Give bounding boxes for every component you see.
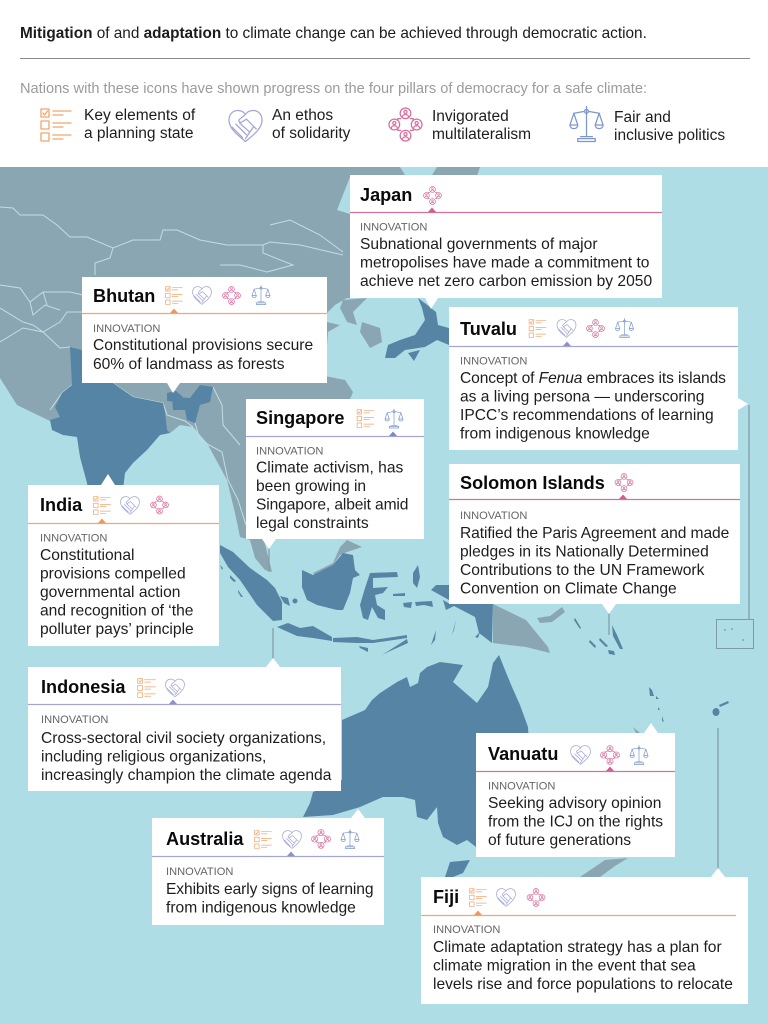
panel: Australia: INNOVATION [166, 866, 233, 878]
map: Vanuatu [649, 687, 664, 722]
legend: inclusive politics: inclusive politics [614, 127, 725, 144]
panel: Fiji: climate migration in the event that sea [433, 958, 696, 974]
panel: India: polluter pays’ principle [40, 621, 194, 638]
panel: Tuvalu: INNOVATION [460, 356, 527, 368]
panel: Bhutan: INNOVATION [93, 323, 160, 335]
legend: solidarity [229, 107, 351, 142]
panel: Vanuatu [476, 723, 675, 857]
panel: Tuvalu: Concept of Fenua embraces its islands [460, 370, 726, 387]
panel: Fiji: Fiji [433, 887, 459, 907]
panel: Fiji [421, 868, 748, 1004]
panel: Solomon Islands: pledges in its Nationally Determined [460, 544, 709, 560]
panel: Bhutan [82, 277, 327, 393]
panel: Vanuatu: Vanuatu [488, 744, 558, 764]
panel: Vanuatu: INNOVATION [488, 780, 555, 792]
legend: inclusive politics [570, 106, 725, 144]
panel: Singapore: been growing in [256, 478, 366, 495]
panel: India: India [40, 495, 83, 515]
panel: Japan: achieve net zero carbon emission by 2050 [360, 273, 652, 290]
panel: Singapore: Singapore, albeit amid [256, 496, 408, 514]
panel: India: provisions compelled [40, 566, 186, 582]
panel: India: and recognition of ‘the [40, 602, 193, 620]
leader lines [269, 405, 749, 870]
legend: planning state: Key elements of [84, 107, 196, 124]
map: Solomon Islands [574, 618, 623, 655]
map: Fiji [712, 708, 720, 716]
panel: Fiji: Climate adaptation strategy has a plan for [433, 939, 722, 956]
legend: multilateralism [389, 108, 531, 143]
panel: Japan: metropolises have made a commitment to [360, 254, 650, 272]
panel: Indonesia: Cross-sectoral civil society organizations, [41, 730, 326, 747]
legend: multilateralism: multilateralism [432, 126, 531, 143]
panel: Australia: from indigenous knowledge [166, 900, 356, 916]
map: India [50, 347, 170, 490]
legend: planning state: a planning state [84, 125, 193, 142]
panel: Tuvalu [449, 307, 748, 450]
panel: Tuvalu: Tuvalu [460, 319, 517, 339]
legend [41, 106, 725, 144]
panel: Japan: Japan [360, 185, 412, 205]
panel: Solomon Islands [449, 464, 740, 614]
panel: Vanuatu: Seeking advisory opinion [488, 795, 661, 812]
subtitle: Nations with these icons have shown progress on the four pillars of democracy for a safe climate: [20, 81, 647, 97]
panel: Australia: Australia [166, 829, 244, 849]
title: Mitigation of and adaptation to climate change can be achieved through democratic action. [20, 25, 647, 42]
legend: solidarity: An ethos [272, 107, 333, 124]
panel: Australia: Exhibits early signs of learning [166, 881, 373, 898]
panel: India: governmental action [40, 584, 180, 601]
panel: Japan [350, 175, 662, 309]
panel: Singapore: Singapore [256, 408, 344, 428]
map: country borders [0, 207, 343, 525]
legend: solidarity: of solidarity [272, 125, 351, 142]
panel: India: INNOVATION [40, 532, 107, 544]
legend: multilateralism: Invigorated [432, 108, 509, 125]
panel: Fiji: INNOVATION [433, 924, 500, 936]
panel: Japan: Subnational governments of major [360, 236, 598, 253]
panel: Indonesia: Indonesia [41, 677, 126, 697]
panel: Singapore: INNOVATION [256, 446, 323, 458]
panel: Fiji: levels rise and force populations to relocate [433, 976, 733, 993]
panel: Indonesia [28, 658, 341, 791]
panel: Japan: INNOVATION [360, 222, 427, 234]
panel: Australia [152, 809, 384, 925]
panel: Solomon Islands: Ratified the Paris Agreement and made [460, 525, 729, 542]
panel: Vanuatu: of future generations [488, 832, 631, 849]
panel: Solomon Islands: Convention on Climate Change [460, 580, 677, 598]
panel: Vanuatu: from the ICJ on the rights [488, 814, 663, 830]
header [20, 25, 750, 97]
panel: India: Constitutional [40, 547, 134, 564]
map: Indonesia [220, 545, 282, 621]
panel: Tuvalu: as a living persona — underscoring [460, 388, 704, 406]
panel: Bhutan: 60% of landmass as forests [93, 356, 285, 373]
legend: inclusive politics: Fair and [614, 109, 671, 126]
panel: Solomon Islands: Contributions to the UN Framework [460, 562, 705, 579]
panel: Singapore [246, 399, 424, 549]
panel: Tuvalu: IPCC’s recommendations of learning [460, 407, 714, 424]
map: highlighted countries (dark blue) [50, 298, 729, 877]
map: Japan [385, 298, 449, 358]
map: Australia [303, 655, 530, 847]
panel: Bhutan: Constitutional provisions secure [93, 337, 313, 354]
panel: Solomon Islands: INNOVATION [460, 510, 527, 522]
panel: Singapore: legal constraints [256, 515, 369, 532]
panel: Indonesia: INNOVATION [41, 714, 108, 726]
panel: Singapore: Climate activism, has [256, 460, 404, 476]
panel: India [28, 474, 219, 646]
panel: Indonesia: including religious organizations, [41, 748, 266, 766]
map: Tuvalu inset box [716, 620, 754, 648]
panel: Tuvalu: from indigenous knowledge [460, 426, 650, 442]
panel: Bhutan: Bhutan [93, 286, 155, 306]
map: surrounding land (grey countries) [0, 167, 640, 877]
legend: planning state [41, 107, 196, 142]
panel: Indonesia: increasingly champion the climate agenda [41, 767, 332, 784]
panel: Solomon Islands: Solomon Islands [460, 473, 605, 493]
